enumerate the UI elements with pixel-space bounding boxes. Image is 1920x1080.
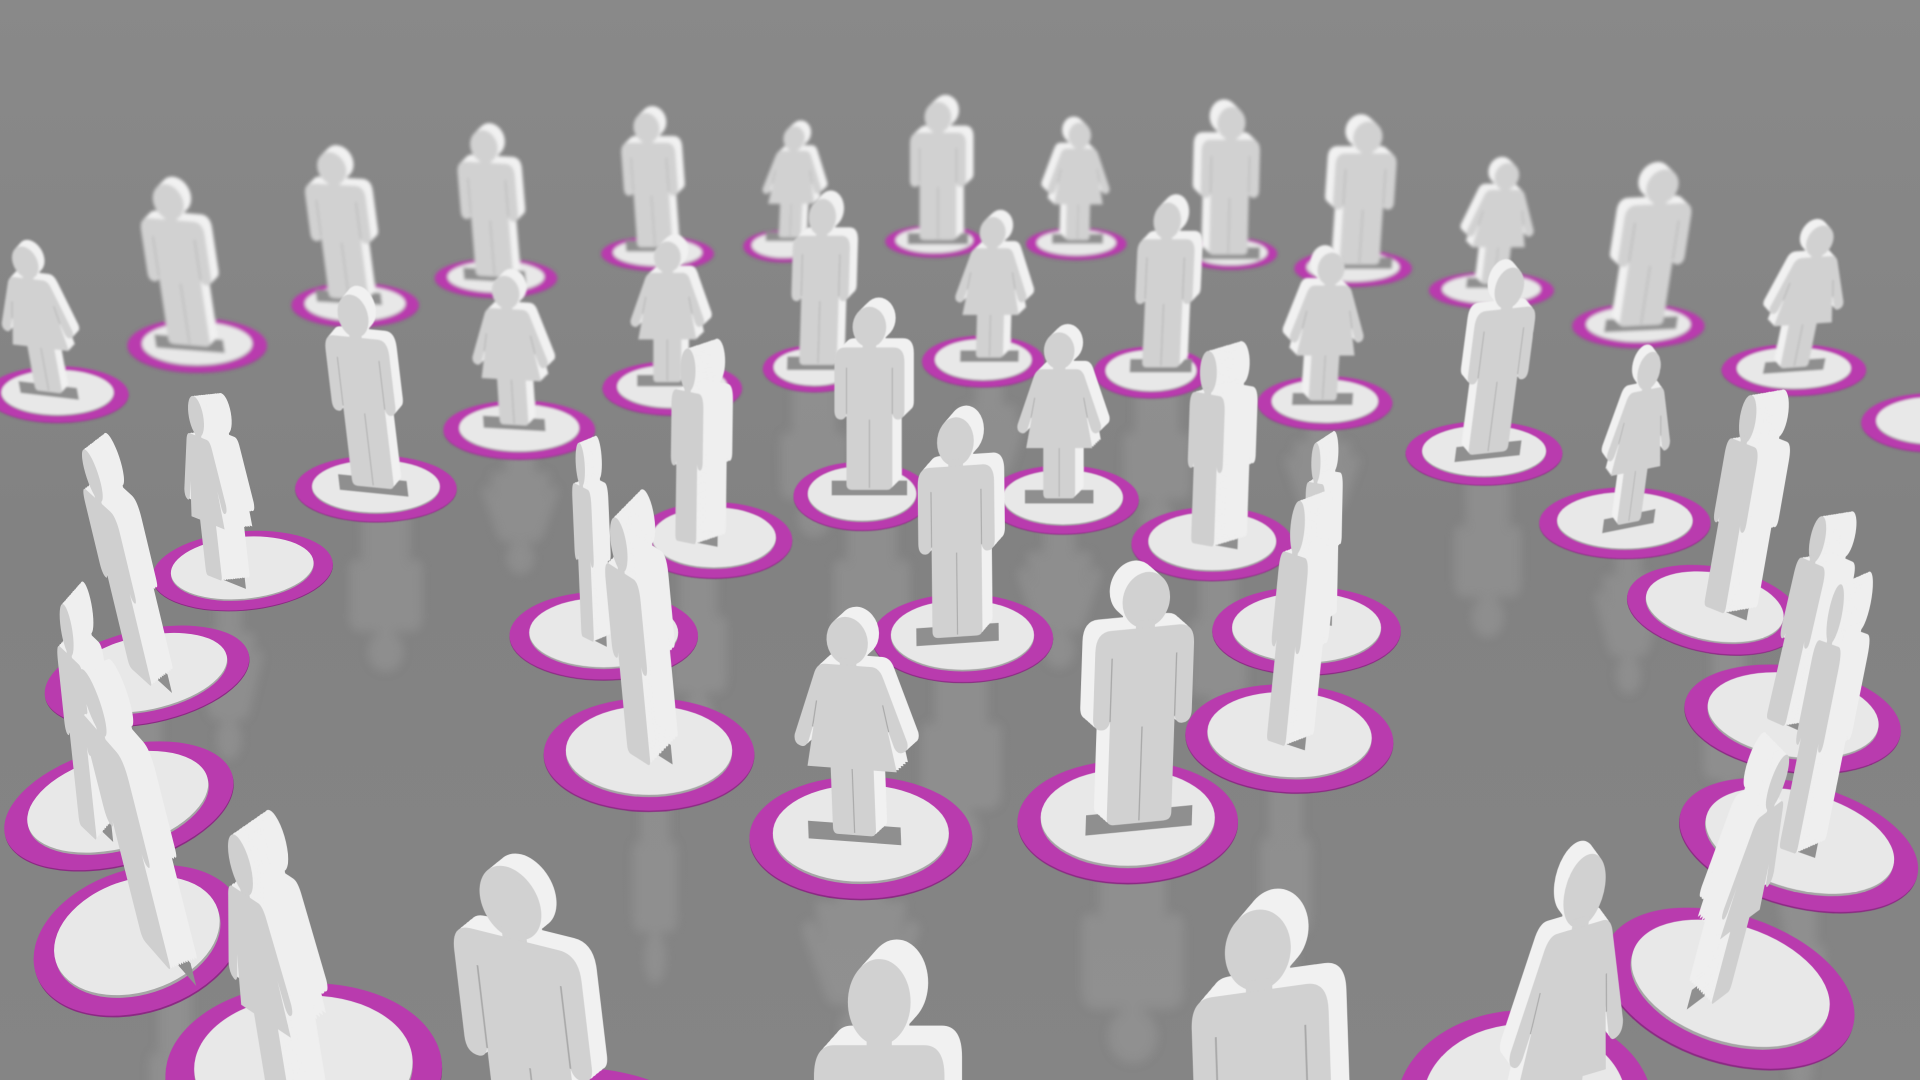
person: left 41	[14, 589, 263, 1043]
person: row two 22	[1406, 255, 1562, 486]
second row of figures, slightly out of focus	[0, 190, 1920, 460]
person: right 24	[1620, 372, 1809, 668]
person: back 4	[435, 121, 557, 298]
person: back 11	[1429, 157, 1554, 309]
middle rows of figures	[295, 255, 1711, 581]
person: foreground right 46	[1396, 821, 1653, 1080]
person: back 6	[743, 120, 830, 262]
person: right 34	[1677, 493, 1908, 787]
person: middle 38	[1183, 476, 1396, 799]
person: middle 33	[1212, 426, 1401, 676]
person: back 5	[601, 106, 714, 271]
person: row three 27	[793, 298, 931, 531]
person: row two 19	[922, 210, 1044, 388]
person: left 25	[149, 373, 336, 619]
person: row two 23	[1539, 337, 1711, 559]
person: row three 28	[987, 324, 1139, 535]
person: foreground 43	[416, 833, 735, 1080]
person: row two 20	[1093, 194, 1209, 399]
person: centre 37	[1018, 554, 1238, 884]
person: centre 36	[749, 602, 972, 900]
person: middle 32	[872, 403, 1053, 683]
disc: cropped at right edge	[1861, 393, 1920, 453]
person: back 10	[1294, 114, 1412, 287]
person: row three 26	[636, 330, 792, 579]
person: back 1	[0, 235, 129, 423]
person: middle 31	[509, 422, 698, 681]
person: row two 18	[763, 190, 866, 392]
person: left 40	[0, 546, 248, 894]
person: right 39	[1664, 558, 1920, 937]
person: back 9	[1184, 99, 1277, 270]
person: back 7	[885, 95, 983, 258]
person: foreground centre 44	[809, 939, 962, 1080]
person: middle 35	[544, 458, 754, 812]
person: row three 29	[1131, 332, 1293, 581]
person: row two 21	[1258, 245, 1392, 430]
person: row two 15	[295, 281, 457, 522]
person: foreground left 42	[161, 761, 447, 1080]
person: right 47	[1582, 688, 1875, 1080]
person: back 3	[291, 143, 419, 327]
person: row two 17	[602, 234, 742, 416]
person: back 13	[1722, 216, 1866, 396]
floor reflections of the figures	[125, 361, 1825, 1080]
back row of figures, out of focus	[127, 95, 1704, 373]
person: foreground 45	[1182, 879, 1356, 1080]
person: row two 16	[443, 266, 595, 460]
person: back 12	[1572, 160, 1704, 348]
person: back 2	[127, 173, 267, 373]
person: back 8	[1026, 116, 1127, 260]
person: left 30	[35, 389, 259, 744]
